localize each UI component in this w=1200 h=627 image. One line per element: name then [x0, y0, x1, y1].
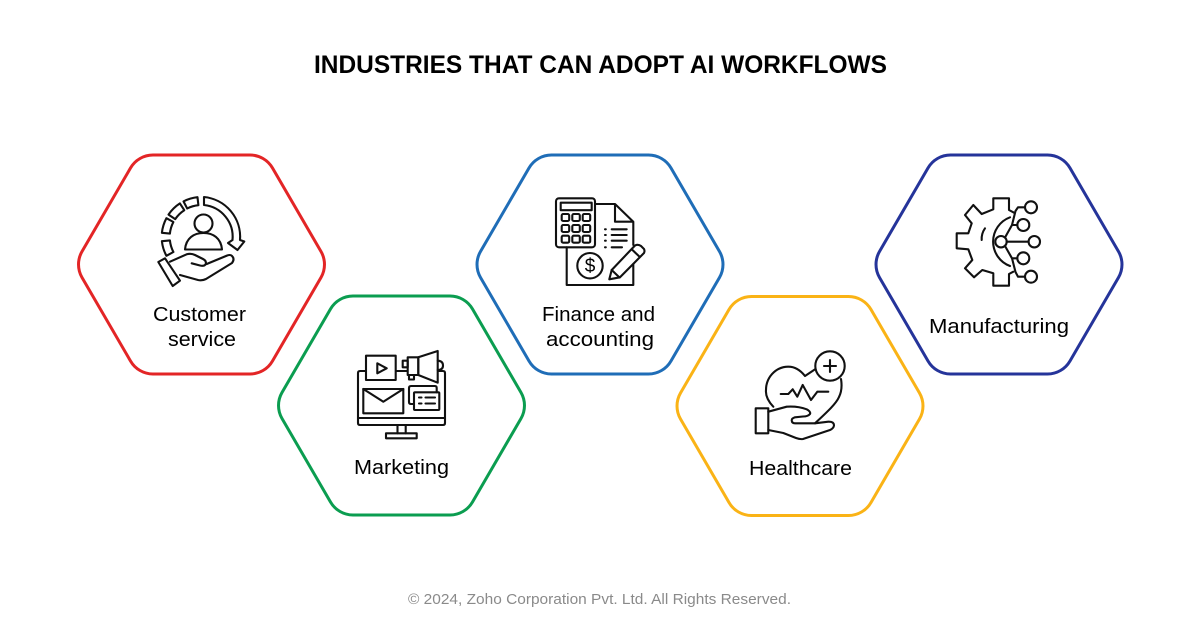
- label: healthcare: Healthcare: [749, 458, 852, 480]
- label: finance and accounting: Finance and: [542, 304, 655, 326]
- icon: heart in hand: [756, 351, 845, 439]
- icon: dollar sign: $: [585, 256, 596, 277]
- panel: healthcare: [677, 296, 923, 516]
- hexagon: customer service: [79, 155, 324, 374]
- icon: marketing monitor: [358, 351, 445, 438]
- label: manufacturing: Manufacturing: [929, 316, 1069, 338]
- panel: customer service: [79, 155, 324, 374]
- title: INDUSTRIES THAT CAN ADOPT AI WORKFLOWS: [314, 51, 887, 79]
- hexagon: manufacturing: [876, 155, 1122, 374]
- hexagon: healthcare: [677, 296, 923, 516]
- panel: manufacturing: [876, 155, 1122, 374]
- icon: customer care: [158, 197, 244, 286]
- hexagon: finance and accounting: [477, 155, 723, 374]
- icon: smart gear: [957, 198, 1040, 286]
- label: customer service: [153, 304, 246, 351]
- label: finance and accounting: [542, 304, 655, 351]
- icon: calculator and invoice: [556, 198, 644, 285]
- label: finance and accounting: accounting: [546, 329, 654, 351]
- hexagon: marketing: [279, 296, 524, 515]
- label: customer service: service: [168, 329, 236, 351]
- panel: finance and accounting: [477, 155, 723, 374]
- label: customer service: Customer: [153, 304, 246, 326]
- footer copyright: © 2024, Zoho Corporation Pvt. Ltd. All Rights Reserved.: [408, 591, 791, 608]
- panel: marketing: [279, 296, 524, 515]
- label: marketing: Marketing: [354, 457, 449, 479]
